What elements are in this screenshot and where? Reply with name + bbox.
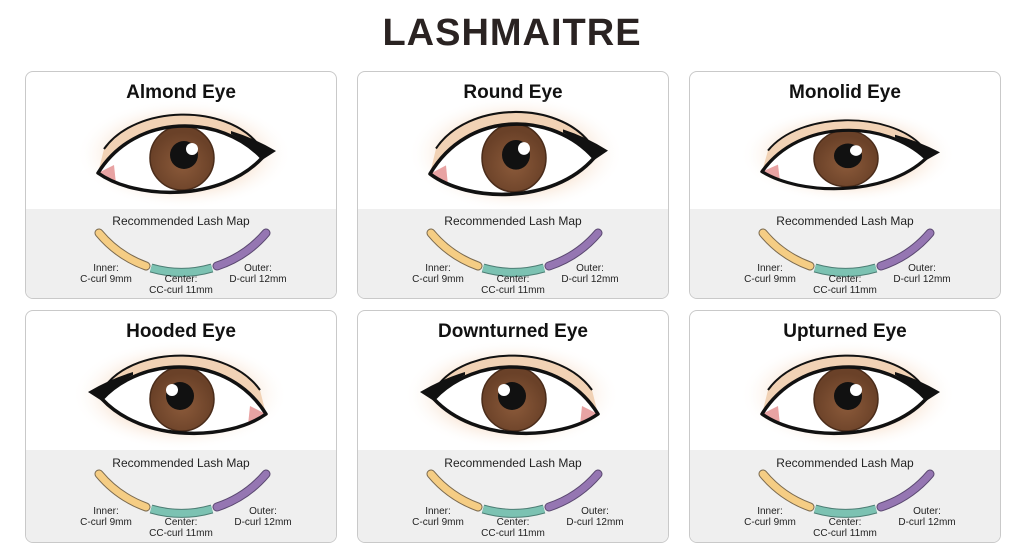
lash map: CC-curl 11mm bbox=[813, 528, 877, 539]
lash map: D-curl 12mm bbox=[561, 274, 619, 285]
icon: monolid eye bbox=[740, 107, 956, 203]
lash map: CC-curl 11mm bbox=[813, 285, 877, 296]
heading: Monolid Eye bbox=[789, 82, 901, 103]
icon: round eye bbox=[408, 95, 624, 212]
lash map: Inner: bbox=[93, 263, 119, 274]
lash map: Inner: bbox=[425, 263, 451, 274]
lash map bbox=[80, 456, 292, 539]
lash map: Recommended Lash Map bbox=[776, 456, 914, 470]
panel: monolid eye bbox=[689, 71, 1001, 299]
lash map bbox=[80, 214, 287, 296]
panel: round eye bbox=[357, 71, 669, 299]
lash map: Outer: bbox=[576, 263, 604, 274]
lash map: D-curl 12mm bbox=[229, 274, 287, 285]
heading: Hooded Eye bbox=[126, 321, 236, 342]
icon: downturned eye bbox=[404, 340, 620, 450]
panel: almond eye bbox=[25, 71, 337, 299]
lash map: Outer: bbox=[249, 506, 277, 517]
lash map: Outer: bbox=[908, 263, 936, 274]
lash map: C-curl 9mm bbox=[412, 517, 464, 528]
lash map: Inner: bbox=[425, 506, 451, 517]
lash map: Inner: bbox=[757, 263, 783, 274]
lash map: Center: bbox=[497, 517, 529, 528]
lash map: D-curl 12mm bbox=[898, 517, 956, 528]
lash map: Outer: bbox=[581, 506, 609, 517]
lash map: Outer: bbox=[244, 263, 272, 274]
lash map: Center: bbox=[165, 274, 197, 285]
lash map: CC-curl 11mm bbox=[481, 528, 545, 539]
lash map bbox=[744, 214, 951, 296]
lash map: D-curl 12mm bbox=[234, 517, 292, 528]
lash map: D-curl 12mm bbox=[566, 517, 624, 528]
heading: Almond Eye bbox=[126, 82, 236, 103]
lash map: Recommended Lash Map bbox=[112, 214, 250, 228]
lash map bbox=[412, 214, 619, 296]
heading: Upturned Eye bbox=[783, 321, 907, 342]
lash map bbox=[412, 456, 624, 539]
heading: Round Eye bbox=[463, 82, 563, 103]
lash map: Center: bbox=[165, 517, 197, 528]
lash map: Recommended Lash Map bbox=[444, 456, 582, 470]
lash map: Center: bbox=[829, 274, 861, 285]
icon: upturned eye bbox=[740, 340, 956, 450]
lash map: CC-curl 11mm bbox=[481, 285, 545, 296]
lash map: Center: bbox=[829, 517, 861, 528]
lash map: Inner: bbox=[757, 506, 783, 517]
lash map: Inner: bbox=[93, 506, 119, 517]
lash map: Center: bbox=[497, 274, 529, 285]
lash map: Recommended Lash Map bbox=[776, 214, 914, 228]
lash map: Recommended Lash Map bbox=[444, 214, 582, 228]
lash map: Outer: bbox=[913, 506, 941, 517]
lash map bbox=[744, 456, 956, 539]
lash map: CC-curl 11mm bbox=[149, 528, 213, 539]
lash map: C-curl 9mm bbox=[744, 274, 796, 285]
lash map: C-curl 9mm bbox=[412, 274, 464, 285]
lash map: C-curl 9mm bbox=[80, 274, 132, 285]
lash map: C-curl 9mm bbox=[80, 517, 132, 528]
icon: hooded eye bbox=[72, 340, 288, 450]
panel: hooded eye bbox=[25, 310, 337, 543]
panel: upturned eye bbox=[689, 310, 1001, 543]
title: LASHMAITRE bbox=[382, 12, 642, 54]
panel: downturned eye bbox=[357, 310, 669, 543]
lash map: Recommended Lash Map bbox=[112, 456, 250, 470]
icon: almond eye bbox=[76, 99, 292, 209]
heading: Downturned Eye bbox=[438, 321, 588, 342]
lash map: CC-curl 11mm bbox=[149, 285, 213, 296]
lash map: C-curl 9mm bbox=[744, 517, 796, 528]
lash map: D-curl 12mm bbox=[893, 274, 951, 285]
